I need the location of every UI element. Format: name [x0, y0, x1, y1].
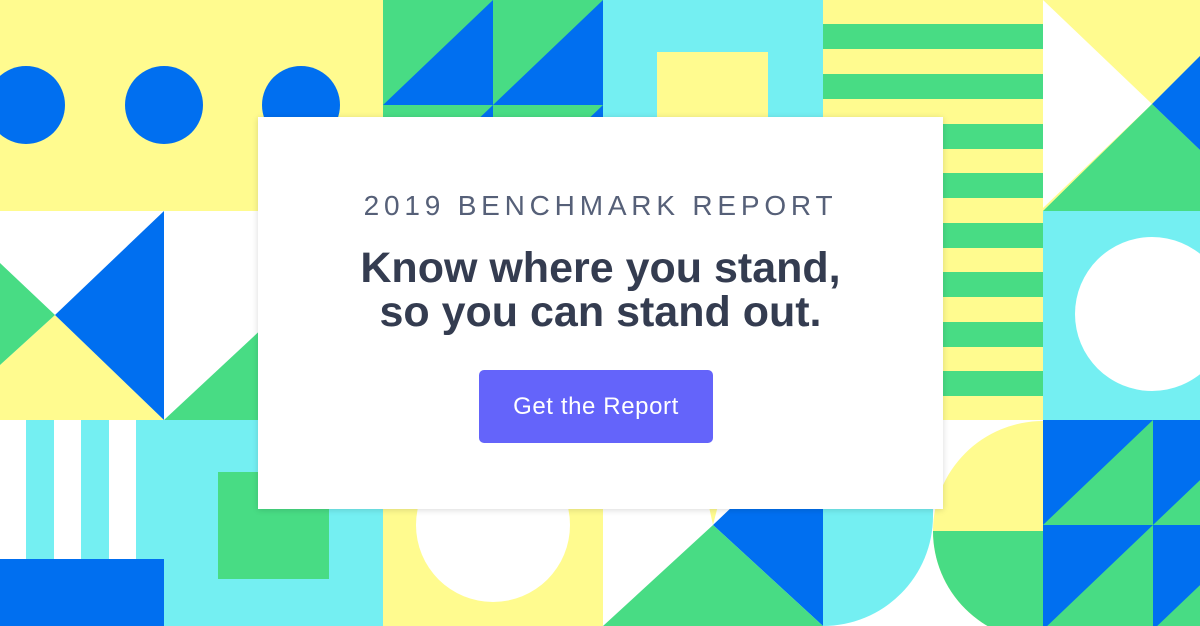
panel: vertical stripes	[0, 420, 164, 626]
panel: white with green triangle	[164, 211, 383, 420]
headline	[360, 244, 841, 336]
eyebrow text: 2019 BENCHMARK REPORT	[364, 190, 837, 221]
headline: so you can stand out.	[380, 288, 822, 336]
panel: yellow with white circle	[383, 420, 603, 626]
panel: top right triangles	[1043, 0, 1200, 211]
panel: cyan with white circle	[1043, 211, 1200, 420]
button	[479, 370, 713, 443]
panel: cyan with green square	[164, 420, 383, 626]
panel: green blue triangles	[383, 0, 603, 420]
button: Get the Report	[513, 393, 679, 420]
panel: yellow circles	[0, 0, 383, 211]
panel: cyan with yellow square	[603, 0, 823, 420]
headline: Know where you stand,	[360, 244, 841, 292]
card	[258, 117, 943, 509]
panel: stripes	[823, 0, 1043, 420]
panel: mountain triangles	[603, 420, 823, 626]
panel: half circles	[823, 421, 1043, 626]
panel: bow tie	[0, 211, 164, 420]
panel: bottom right triangles	[1043, 420, 1200, 626]
